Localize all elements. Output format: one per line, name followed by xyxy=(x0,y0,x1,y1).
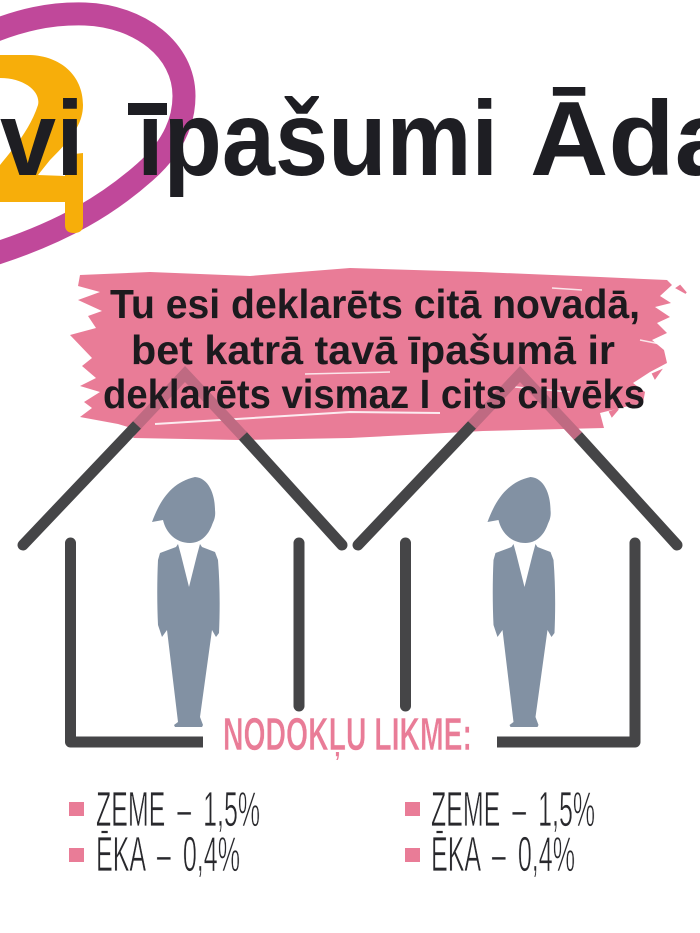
title: īpašumi xyxy=(135,80,498,198)
banner text: Tu esi deklarēts citā novadā, xyxy=(110,281,640,327)
banner text: bet katrā tavā īpašumā ir xyxy=(131,327,615,373)
icon: person right xyxy=(488,477,555,727)
icon: yellow painted number 2 xyxy=(0,55,83,233)
title: vi xyxy=(0,80,84,198)
house: right xyxy=(358,374,677,742)
banner text xyxy=(103,281,645,417)
title xyxy=(0,80,700,198)
heading: tax rate: NODOKĻU LIKME: xyxy=(223,708,472,761)
icon: person left xyxy=(152,477,220,727)
list: left tax rates: ĒKA – 0,4% xyxy=(96,828,240,882)
list: right tax rates xyxy=(405,783,595,882)
list: left tax rates xyxy=(69,783,260,882)
icon: magenta hand-drawn circle xyxy=(0,14,184,256)
house: left xyxy=(23,374,342,742)
banner text: deklarēts vismaz I cits cilvēks xyxy=(103,371,645,417)
panel: pink brush stroke banner xyxy=(70,268,686,440)
list: left tax rates: ZEME – 1,5% xyxy=(96,783,260,837)
